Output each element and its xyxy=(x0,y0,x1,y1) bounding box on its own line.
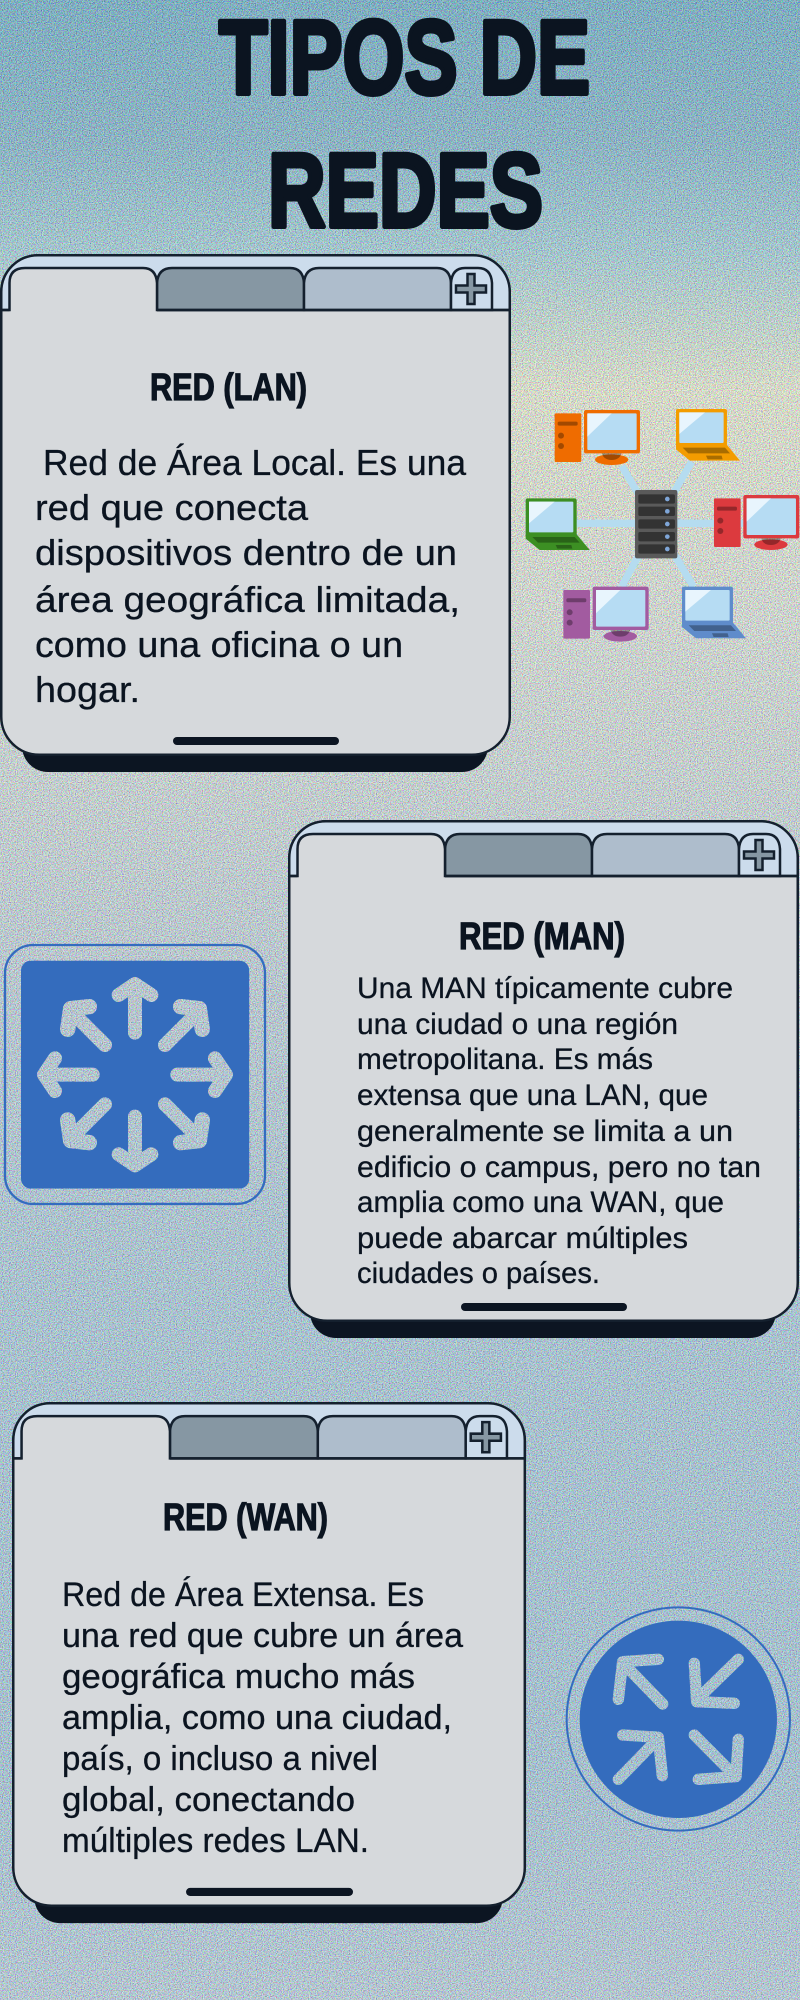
heading: RED (WAN): RED (WAN) xyxy=(163,1497,328,1539)
heading: RED (LAN): RED (LAN) xyxy=(150,367,307,409)
text block: MAN description: una ciudad o una región xyxy=(357,1008,678,1041)
panel frame: WAN window xyxy=(13,1403,525,1923)
text block: MAN description: metropolitana. Es más xyxy=(357,1043,653,1076)
text block: WAN description: una red que cubre un área xyxy=(62,1617,463,1655)
panel frame: MAN window xyxy=(289,821,798,1338)
text block: MAN description: extensa que una LAN, que xyxy=(357,1079,708,1112)
panel frame: LAN window xyxy=(1,255,510,772)
text block: LAN description: red que conecta xyxy=(35,487,309,528)
title xyxy=(219,0,590,250)
text block: WAN description: país, o incluso a nivel xyxy=(62,1740,378,1778)
title: REDES xyxy=(268,132,543,250)
text block: WAN description xyxy=(62,1576,463,1860)
text block: LAN description: como una oficina o un xyxy=(35,624,403,665)
text block: MAN description: puede abarcar múltiples xyxy=(357,1222,688,1255)
text block: LAN description: hogar. xyxy=(35,669,140,710)
panel: LAN xyxy=(1,255,510,772)
title: TIPOS DE xyxy=(219,0,590,116)
text block: MAN description: generalmente se limita a un xyxy=(357,1115,733,1148)
text block: MAN description: amplia como una WAN, que xyxy=(357,1186,724,1219)
text block: MAN description: ciudades o países. xyxy=(357,1257,600,1290)
text block: MAN description: Una MAN típicamente cubre xyxy=(357,972,733,1005)
text block: MAN description xyxy=(357,972,761,1290)
icon: inward arrows xyxy=(567,1607,790,1831)
icon: outward arrows xyxy=(5,945,265,1204)
text block: WAN description: múltiples redes LAN. xyxy=(62,1822,369,1860)
panel: WAN xyxy=(13,1403,525,1923)
text block: MAN description: edificio o campus, pero no tan xyxy=(357,1151,761,1184)
text block: LAN description: Red de Área Local. Es una xyxy=(43,442,467,483)
text block: LAN description xyxy=(35,442,467,710)
text block: LAN description: área geográfica limitada, xyxy=(35,579,460,620)
text block: WAN description: global, conectando xyxy=(62,1781,355,1819)
icon: LAN network diagram xyxy=(526,409,799,642)
heading: RED (MAN): RED (MAN) xyxy=(459,916,625,958)
text block: WAN description: geográfica mucho más xyxy=(62,1658,415,1696)
text block: LAN description: dispositivos dentro de un xyxy=(35,532,457,573)
panel: MAN xyxy=(289,821,798,1338)
text block: WAN description: amplia, como una ciudad, xyxy=(62,1699,452,1737)
text block: WAN description: Red de Área Extensa. Es xyxy=(62,1576,424,1614)
